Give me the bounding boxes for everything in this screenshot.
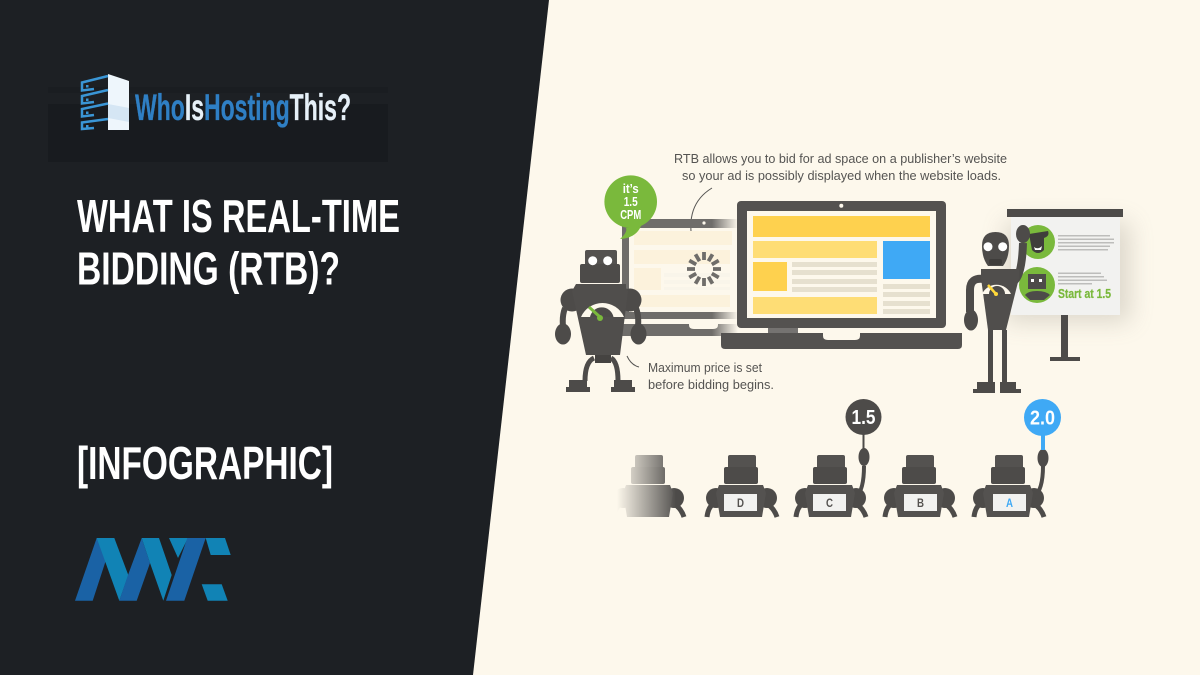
main laptop with web page xyxy=(721,201,962,349)
brand logo mark xyxy=(75,538,231,601)
bidder robot A with 2.0 paddle: A xyxy=(1006,496,1013,510)
explanatory text: RTB: RTB allows you to bid for ad space on a publisher’s website xyxy=(674,151,1007,166)
page banner xyxy=(753,216,930,237)
board caption: Start at 1.5 xyxy=(1058,287,1111,301)
loading spinner xyxy=(687,252,721,286)
gauge xyxy=(581,303,624,317)
avatar: person xyxy=(1021,225,1055,259)
explanatory text: RTB xyxy=(674,151,1007,183)
bidder robot A with 2.0 paddle: 2.0 xyxy=(1030,408,1055,430)
explanatory text: maximum price xyxy=(648,360,774,392)
bidder robot C with 1.5 paddle: 1.5 xyxy=(852,407,876,429)
bidder robot C with 1.5 paddle xyxy=(795,399,882,517)
explanatory text: maximum price: before bidding begins. xyxy=(648,377,774,392)
logo: WhoIsHostingThis: WhoIsHostingThis? xyxy=(135,87,351,128)
explanatory text: RTB: so your ad is possibly displayed when the website loads. xyxy=(682,168,1001,183)
title xyxy=(77,190,400,294)
infographic tag: [INFOGRAPHIC] xyxy=(77,437,333,489)
right robot presenter xyxy=(964,225,1030,393)
leader line: RTB text xyxy=(691,188,712,244)
avatar: robot xyxy=(1019,267,1055,303)
gauge xyxy=(982,285,1011,294)
speech bubble: 1.5 CPM xyxy=(604,175,657,239)
blue ad slot xyxy=(883,241,930,279)
bidder robot A with 2.0 paddle xyxy=(973,399,1061,517)
cream slanted panel xyxy=(473,0,1200,675)
speech bubble: 1.5 CPM: 1.5 xyxy=(624,194,638,209)
bidder robot D xyxy=(706,455,777,517)
bidder robot B: B xyxy=(917,496,924,510)
title: WHAT IS REAL-TIME xyxy=(77,190,400,242)
bidder robot C with 1.5 paddle: C xyxy=(826,496,833,510)
logo: WhoIsHostingThis xyxy=(48,74,388,162)
bidder robot D: D xyxy=(737,496,744,510)
speech bubble: 1.5 CPM: CPM xyxy=(620,207,641,222)
speech bubble: 1.5 CPM: it’s xyxy=(623,181,639,196)
leader line: maximum price xyxy=(627,356,639,367)
left robot with price gauge xyxy=(555,250,646,392)
bidder robot B xyxy=(884,455,955,517)
bidder robot: faded xyxy=(610,450,684,520)
back laptop with loading spinner xyxy=(622,219,738,336)
title: BIDDING (RTB)? xyxy=(77,242,340,294)
explanatory text: maximum price: Maximum price is set xyxy=(648,360,762,375)
presentation board xyxy=(1005,209,1130,361)
